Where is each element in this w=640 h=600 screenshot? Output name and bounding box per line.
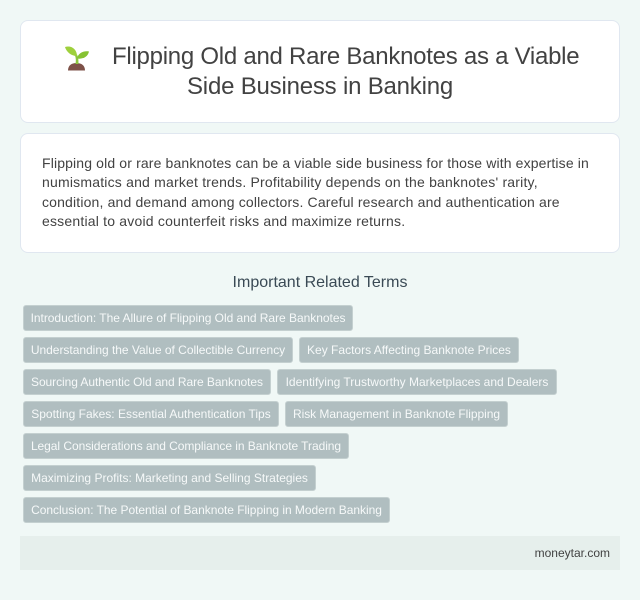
tag 1 <box>23 305 353 331</box>
tag 10: Conclusion: The Potential of Banknote Flipping in Modern Banking <box>31 503 382 517</box>
footer: source <box>20 536 620 570</box>
tag 2 <box>23 337 293 363</box>
title: Side Business in Banking <box>187 73 453 100</box>
panel: description text <box>20 133 620 253</box>
tag 1: Introduction: The Allure of Flipping Old and Rare Banknotes <box>31 311 345 325</box>
icon: seedling <box>65 46 89 70</box>
panel: description text: numismatics and market trends. Profitability depends on the banknotes' rarity, <box>42 174 538 190</box>
panel: description text: essential to avoid counterfeit risks and maximize returns. <box>42 213 405 229</box>
footer: source: moneytar.com <box>535 546 610 560</box>
tag 9: Maximizing Profits: Marketing and Selling Strategies <box>31 471 308 485</box>
heading: important related terms: Important Related Terms <box>233 274 407 291</box>
tag 4 <box>23 369 271 395</box>
tag 6: Spotting Fakes: Essential Authentication Tips <box>31 407 271 421</box>
title: Flipping Old and Rare Banknotes as a Viable <box>112 43 579 70</box>
list of term tags <box>23 305 557 523</box>
panel: description text: condition, and demand among collectors. Careful research and authentication are <box>42 194 560 210</box>
tag 2: Understanding the Value of Collectible Currency <box>31 343 285 357</box>
panel: description text: Flipping old or rare banknotes can be a viable side business for those with expertise in <box>42 155 589 171</box>
tag 5 <box>277 369 557 395</box>
tag 3: Key Factors Affecting Banknote Prices <box>307 343 511 357</box>
tag 9 <box>23 465 316 491</box>
tag 3 <box>299 337 519 363</box>
tag 7 <box>285 401 508 427</box>
tag 8 <box>23 433 349 459</box>
tag 10 <box>23 497 390 523</box>
tag 8: Legal Considerations and Compliance in Banknote Trading <box>31 439 341 453</box>
tag 7: Risk Management in Banknote Flipping <box>293 407 500 421</box>
title <box>112 43 579 100</box>
tag 5: Identifying Trustworthy Marketplaces and Dealers <box>286 375 548 389</box>
tag 4: Sourcing Authentic Old and Rare Banknotes <box>31 375 263 389</box>
panel: title card <box>20 20 620 123</box>
tag 6 <box>23 401 279 427</box>
